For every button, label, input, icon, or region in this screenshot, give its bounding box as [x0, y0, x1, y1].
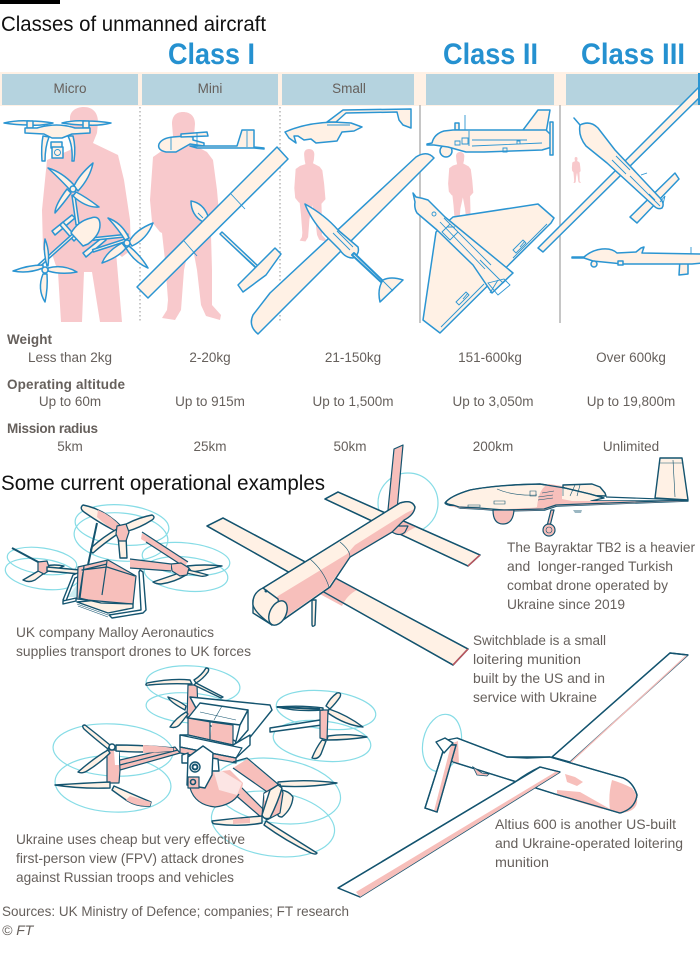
top rule	[0, 0, 60, 4]
human silhouette: class II	[448, 152, 474, 227]
caption: Bayraktar: Ukraine since 2019	[507, 596, 625, 612]
header: mini	[142, 74, 278, 105]
label: altitude: Operating altitude	[7, 377, 125, 392]
copyright: © FT	[2, 922, 35, 938]
icon: class III top view	[538, 73, 700, 252]
illustration: Malloy transport drone	[3, 501, 231, 618]
illustration: FPV attack drone	[52, 663, 378, 864]
row: mission radius	[7, 421, 659, 454]
caption: Switchblade: service with Ukraine	[473, 689, 597, 705]
header: micro: Micro	[54, 81, 86, 96]
header: mini: Mini	[198, 81, 222, 96]
row: mission radius: Unlimited	[603, 439, 659, 454]
row: weight: Over 600kg	[596, 350, 666, 365]
caption: Bayraktar: and longer-ranged Turkish	[507, 558, 673, 574]
drum magazine	[190, 765, 243, 807]
caption: Altius: munition	[495, 854, 549, 870]
row: operating altitude: Up to 915m	[175, 394, 245, 409]
class I heading: Class I	[168, 38, 255, 71]
row: weight: 2-20kg	[189, 350, 231, 365]
title: Classes of unmanned aircraft	[1, 13, 266, 36]
section heading: Some current operational examples	[1, 472, 325, 495]
illustration: Altius 600	[338, 653, 688, 897]
human silhouette: small	[294, 149, 326, 242]
class II heading: Class II	[443, 38, 538, 71]
header: class II	[426, 74, 554, 105]
icon: micro tilt-rotor drone	[13, 163, 153, 302]
icon: mini drone top view	[137, 147, 288, 298]
icon: class II delta top view	[413, 193, 554, 333]
row: weight: 21-150kg	[325, 350, 381, 365]
row: operating altitude	[7, 377, 675, 409]
sources: Sources: UK Ministry of Defence; companies; FT research	[2, 903, 349, 919]
caption: Altius: and Ukraine-operated loitering	[495, 835, 683, 851]
label: mission radius: Mission radius	[7, 421, 98, 436]
caption: Switchblade: Switchblade is a small	[473, 632, 606, 648]
header: small: Small	[332, 81, 366, 96]
front-right rotor assembly	[212, 781, 337, 854]
rear plate and batteries	[180, 697, 272, 763]
row: operating altitude: Up to 1,500m	[312, 394, 394, 409]
caption: Switchblade	[473, 632, 606, 705]
row: weight	[7, 332, 666, 365]
category header band	[0, 72, 700, 106]
class III heading: Class III	[581, 38, 685, 71]
caption: Altius: Altius 600 is another US-built	[495, 816, 676, 832]
icon: mini drone side view	[159, 130, 264, 152]
header: class III	[566, 74, 698, 105]
icon: class III side view	[572, 247, 700, 275]
header: small	[282, 74, 414, 105]
caption: Ukraine FPV: against Russian troops and vehicles	[16, 869, 234, 885]
row: mission radius: 25km	[193, 439, 227, 454]
caption: Bayraktar: The Bayraktar TB2 is a heavier	[507, 539, 695, 555]
human silhouette: class III	[572, 157, 581, 183]
icon: small drone side view	[285, 109, 411, 143]
row: weight: 151-600kg	[458, 350, 522, 365]
human silhouette: micro	[42, 107, 131, 322]
caption: Malloy: supplies transport drones to UK forces	[16, 643, 251, 659]
caption: Ukraine FPV	[16, 831, 245, 885]
class labels	[168, 38, 685, 71]
camera head	[182, 746, 219, 788]
caption: Malloy: UK company Malloy Aeronautics	[16, 624, 214, 640]
illustration: Bayraktar TB2	[445, 458, 688, 536]
header: micro	[2, 74, 138, 105]
back-left rotor assembly	[146, 668, 223, 728]
caption: Switchblade: loitering munition	[473, 651, 581, 667]
icon: small drone top view	[251, 154, 434, 334]
row: mission radius: 200km	[473, 439, 513, 454]
caption: Altius	[495, 816, 683, 870]
illustration: Switchblade	[207, 445, 480, 665]
row: mission radius: 5km	[57, 439, 83, 454]
caption: Bayraktar: combat drone operated by	[507, 577, 668, 593]
label: weight: Weight	[7, 332, 52, 347]
row: operating altitude: Up to 3,050m	[452, 394, 534, 409]
caption: Ukraine FPV: Ukraine uses cheap but very effective	[16, 831, 245, 847]
icon: class II side view	[427, 110, 553, 157]
human silhouette: mini	[150, 112, 221, 320]
icon: micro quadcopter	[4, 121, 111, 161]
left rotor assembly	[55, 725, 180, 806]
caption: Bayraktar	[507, 539, 695, 612]
row: operating altitude: Up to 19,800m	[587, 394, 675, 409]
back-right rotor assembly	[270, 693, 367, 758]
caption: Malloy	[16, 624, 251, 659]
caption: Switchblade: built by the US and in	[473, 670, 605, 686]
row: operating altitude: Up to 60m	[39, 394, 101, 409]
row: mission radius: 50km	[333, 439, 367, 454]
front-right arms	[233, 758, 279, 818]
caption: Ukraine FPV: first-person view (FPV) attack drones	[16, 850, 244, 866]
row: weight: Less than 2kg	[28, 350, 112, 365]
